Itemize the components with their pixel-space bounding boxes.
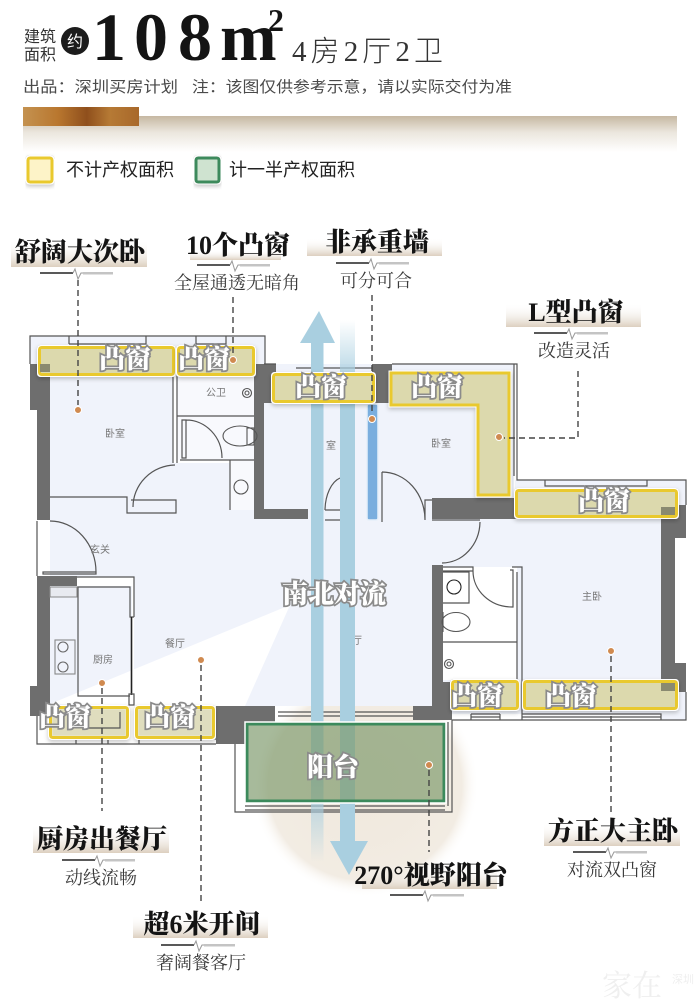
icon: fixtures bbox=[50, 388, 470, 674]
room labels: 厨房 bbox=[93, 653, 113, 666]
source line: 注：该图仅供参考示意，请以实际交付为准 bbox=[192, 77, 512, 96]
bay window: second bedroom bbox=[40, 344, 174, 374]
callout: kitchen: 厨房出餐厅 bbox=[37, 824, 167, 854]
room labels bbox=[90, 388, 602, 666]
watermark: 深圳 bbox=[672, 973, 694, 986]
legend: yellow text: 不计产权面积 bbox=[66, 160, 174, 180]
floors bbox=[30, 336, 686, 720]
bay window: master bedroom: 凸窗 bbox=[545, 681, 597, 711]
arrow up bbox=[300, 311, 335, 862]
walls bbox=[30, 364, 686, 744]
callout: six-metre living room bbox=[133, 910, 268, 973]
leader lines and dots bbox=[74, 280, 614, 903]
room labels: 公卫 bbox=[206, 388, 226, 399]
bay window: dining bbox=[136, 702, 214, 738]
callout: second bedroom bbox=[11, 237, 148, 279]
room labels: 卧室 bbox=[431, 437, 451, 450]
area number: m bbox=[220, 0, 277, 75]
callout: non load-bearing wall bbox=[307, 227, 442, 291]
callout: master bedroom: 方正大主卧 bbox=[548, 816, 681, 846]
airflow label: 南北对流 bbox=[282, 580, 387, 609]
callout: kitchen bbox=[33, 824, 169, 888]
callout: non load-bearing wall: 非承重墙 bbox=[325, 227, 429, 257]
room layout: 4房2厅2卫 bbox=[292, 35, 443, 68]
arrow: north to south airflow bbox=[300, 311, 368, 875]
bay window: middle bedroom bbox=[274, 372, 374, 402]
non load-bearing wall bbox=[367, 404, 378, 520]
arrow down bbox=[330, 320, 368, 875]
callout: master bedroom bbox=[544, 816, 681, 880]
callout: kitchen: 动线流畅 bbox=[65, 868, 137, 888]
room labels: 室 bbox=[326, 439, 336, 452]
area number: 8 bbox=[178, 0, 212, 75]
bay window: second bedroom: 凸窗 bbox=[99, 344, 151, 374]
bay window: kitchen bbox=[39, 702, 128, 738]
bay window: bathroom: 凸窗 bbox=[178, 344, 230, 374]
source line: 出品：深圳买房计划 bbox=[23, 78, 178, 96]
callout: L-shaped bay window bbox=[506, 297, 641, 361]
label: building area: 面积 bbox=[24, 46, 56, 64]
label: building area: 建筑 bbox=[24, 28, 56, 46]
badge: approximately: 约 bbox=[67, 33, 83, 51]
callout: non load-bearing wall: 可分可合 bbox=[340, 271, 412, 291]
balcony beige glow bbox=[251, 673, 479, 897]
bay window: bathroom bbox=[178, 344, 254, 374]
callout: ten bay windows: 10个凸窗 bbox=[186, 230, 290, 260]
callout: L-shaped bay window: L型凸窗 bbox=[528, 297, 624, 327]
room labels: 厅 bbox=[352, 636, 362, 647]
legend: yellow swatch bbox=[28, 158, 52, 182]
callout: ten bay windows bbox=[174, 230, 300, 293]
callout: second bedroom: 舒阔大次卧 bbox=[15, 237, 148, 267]
legend bbox=[28, 158, 355, 182]
bay window: master top bbox=[516, 486, 676, 516]
balcony half-area zone bbox=[245, 722, 446, 803]
floor plan bbox=[30, 336, 686, 812]
watermark: 家在 bbox=[602, 970, 662, 1003]
balcony half-area zone: 阳台 bbox=[307, 753, 361, 782]
area number: 0 bbox=[134, 0, 168, 75]
legend: green text: 计一半产权面积 bbox=[229, 160, 355, 180]
plan lines bbox=[30, 336, 686, 812]
bay window: middle bedroom: 凸窗 bbox=[295, 372, 347, 402]
bay window: kitchen: 凸窗 bbox=[39, 702, 91, 732]
watermark bbox=[602, 970, 694, 1003]
callout: six-metre living room: 奢阔餐客厅 bbox=[156, 952, 246, 973]
bay window: L shape bbox=[391, 372, 509, 495]
source line bbox=[23, 77, 512, 96]
badge: approximately bbox=[61, 27, 89, 55]
bay window: dining: 凸窗 bbox=[144, 702, 196, 732]
room labels: 主卧 bbox=[582, 590, 602, 603]
callout: L-shaped bay window: 改造灵活 bbox=[538, 341, 610, 361]
room labels: 卧室 bbox=[105, 427, 125, 440]
bay window: L shape: 凸窗 bbox=[411, 372, 463, 402]
superscript 2: 2 bbox=[268, 2, 284, 38]
area number: 1 bbox=[92, 0, 126, 75]
room labels: 玄关 bbox=[90, 543, 110, 556]
callout: ten bay windows: 全屋通透无暗角 bbox=[174, 273, 300, 293]
callout: six-metre living room: 超6米开间 bbox=[143, 910, 261, 939]
callout: balcony: 270°视野阳台 bbox=[354, 861, 510, 890]
bay window: master bedroom bbox=[524, 681, 676, 711]
header: area title bbox=[24, 0, 443, 75]
bay window: master top: 凸窗 bbox=[578, 486, 630, 516]
callout: master bedroom: 对流双凸窗 bbox=[567, 860, 657, 880]
header gradient band bbox=[23, 107, 677, 152]
legend: green swatch bbox=[196, 158, 219, 182]
bay window: master bath: 凸窗 bbox=[451, 681, 503, 711]
room labels: 餐厅 bbox=[165, 637, 185, 650]
